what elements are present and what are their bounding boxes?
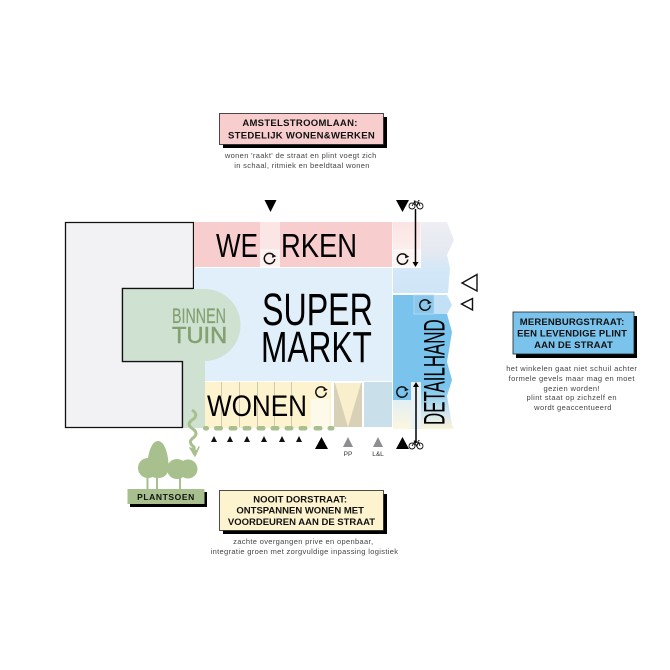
heading: detailhandel: DETAILHAND <box>419 319 452 425</box>
heading: supermarkt <box>261 286 373 372</box>
building outline: existing block <box>66 222 194 428</box>
panel: supermarkt <box>194 268 392 381</box>
icon: loading entrance <box>372 437 384 458</box>
icon: north entrance <box>264 200 276 212</box>
text block: merenburgstraat description: plint staat op zichzelf en <box>527 393 617 402</box>
panel: logistiek cel <box>334 383 362 427</box>
icon: large view triangle <box>462 274 477 291</box>
callout: merenburgstraat: AAN DE STRAAT <box>534 340 613 351</box>
text block: amstelstroomlaan description: wonen 'raakt' de straat en plint voegt zich <box>224 151 377 160</box>
callout: merenburgstraat <box>513 312 637 358</box>
text block: amstelstroomlaan description: in schaal, ritmiek en beeldtaal wonen <box>234 161 370 170</box>
icon: north entrance with bike <box>396 200 423 212</box>
label: plantsoen: PLANTSOEN <box>137 492 195 502</box>
heading: werken: RKEN <box>281 229 357 265</box>
panel: wonen <box>205 382 331 428</box>
callout: amstelstroomlaan: AMSTELSTROOMLAAN: <box>242 118 358 129</box>
icon: south entrance with bike <box>396 437 423 449</box>
icon: trees <box>138 441 198 489</box>
icon: loading entrance: L&L <box>372 451 384 458</box>
panel: detailhandel <box>393 295 454 429</box>
callout: amstelstroomlaan <box>220 114 387 148</box>
text block: merenburgstraat description: het winkelen gaat niet schuil achter <box>506 364 637 373</box>
heading: supermarkt: SUPER <box>262 286 373 335</box>
heading: binnen tuin <box>172 304 227 348</box>
panel: upper right street band <box>393 222 454 293</box>
icon: front door markers <box>211 436 302 442</box>
arrow: north bike route <box>412 209 418 267</box>
panel: binnentuin <box>122 288 241 428</box>
callout: nooit dorstraat: VOORDEUREN AAN DE STRAAT <box>228 517 375 528</box>
text block: merenburgstraat description: gezien worden! <box>544 384 600 393</box>
callout: merenburgstraat: MERENBURGSTRAAT: <box>520 317 624 328</box>
arrow: south bike route <box>413 382 419 443</box>
heading: wonen: WONEN <box>207 389 307 422</box>
heading: supermarkt: MARKT <box>261 323 372 372</box>
label: plantsoen <box>128 489 207 507</box>
panel: werken <box>194 222 420 267</box>
callout: merenburgstraat: EEN LEVENDIGE PLINT <box>517 328 627 340</box>
callout: nooit dorstraat: NOOIT DORSTRAAT: <box>253 494 347 506</box>
callout: nooit dorstraat: ONTSPANNEN WONEN MET <box>236 506 364 516</box>
panel: laden en lossen cel <box>364 382 392 427</box>
icon: rotating doors <box>264 253 432 397</box>
garden hedge dashes <box>203 426 334 430</box>
icon: small view triangle <box>462 298 472 310</box>
arrow: green wavy route <box>189 410 199 456</box>
icon: parking entrance <box>343 437 353 458</box>
text block: merenburgstraat description: wordt geaccentueerd <box>533 403 612 412</box>
heading: binnen tuin: TUIN <box>172 322 227 348</box>
icon: main entrance south <box>315 437 328 449</box>
text block: nooit dorstraat description: zachte overgangen prive en openbaar, <box>233 537 373 546</box>
heading: binnen tuin: BINNEN <box>172 304 226 328</box>
text block: merenburgstraat description: formele gevels maar mag en moet <box>509 374 635 383</box>
callout: amstelstroomlaan: STEDELIJK WONEN&WERKEN <box>228 130 375 142</box>
heading: werken <box>216 228 357 265</box>
heading: werken: WE <box>216 228 258 265</box>
icon: parking entrance: PP <box>344 451 352 458</box>
text block: nooit dorstraat description: integratie groen met zorgvuldige inpassing logistiek <box>211 547 398 556</box>
callout: nooit dorstraat <box>220 490 387 534</box>
